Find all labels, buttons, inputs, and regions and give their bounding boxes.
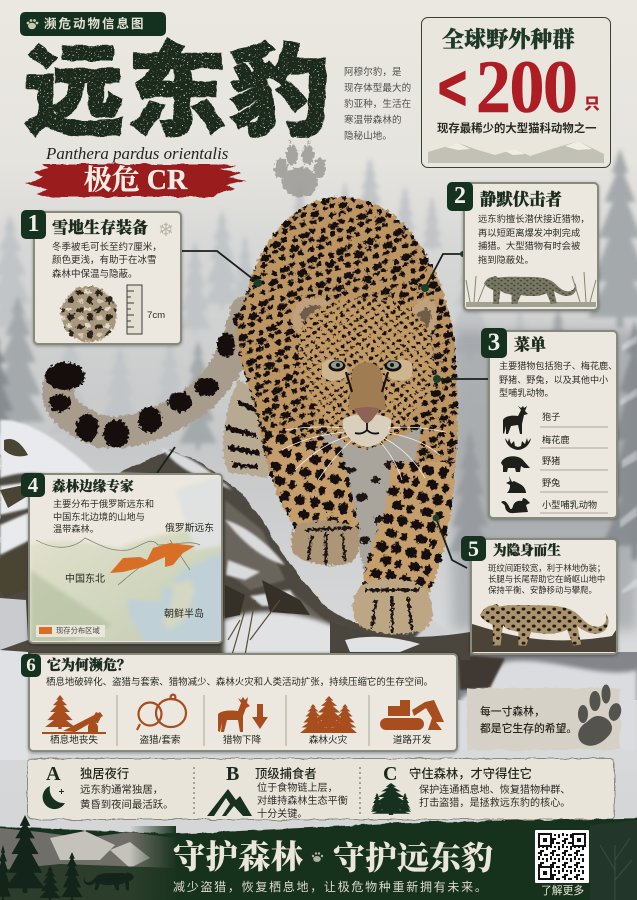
- ruler: [127, 285, 142, 334]
- description: 栖息地破碎化、盗猎与套索、猎物减少、森林火灾和人类活动扩张，持续压缩它的生存空间。: [46, 677, 433, 688]
- badge 6: [21, 654, 41, 677]
- panel 3: prey menu: 梅花鹿: [542, 434, 570, 444]
- tag: endangered animal infographic: 濒危动物信息图: [44, 17, 146, 31]
- badge 6: 6: [26, 655, 36, 676]
- heading: 菜单: [514, 337, 546, 354]
- icon: small paw: [26, 19, 38, 30]
- panel 6: why endangered: [21, 652, 460, 755]
- icon labels: 栖息地丧失: [50, 735, 98, 746]
- panel 3: prey menu: 野猪: [542, 456, 560, 466]
- QR code: [535, 830, 589, 883]
- panel 2: silent ambusher: [447, 181, 601, 561]
- heading: 静默伏击者: [480, 190, 562, 209]
- fact A: text: 远东豹通常独居， 黄昏到夜间最活跃。: [80, 785, 174, 811]
- latin name: Panthera pardus orientalis: [46, 144, 228, 163]
- mountain engraving: [428, 141, 604, 163]
- description: 主要分布于俄罗斯远东和 中国东北边境的山地与 温带森林。: [53, 499, 154, 534]
- connector lines: [157, 251, 488, 568]
- fact A: heading: 独居夜行: [80, 767, 129, 781]
- status banner: critically endangered: 极危 CR: [84, 165, 187, 196]
- heading: 全球野外种群: [442, 27, 575, 52]
- description: 主要猎物包括狍子、梅花鹿、 野猪、野兔，以及其他中小 型哺乳动物。: [499, 361, 617, 398]
- note: every inch of forest: [466, 684, 622, 752]
- fur sample: [60, 284, 142, 343]
- panel 3: prey menu: [481, 328, 620, 522]
- fact B: text: 位于食物链上层， 对维持森林生态平衡 十分关键。: [257, 783, 348, 820]
- panel 6: why endangered: 猎物下降: [223, 735, 261, 746]
- slogan: 守护森林: [173, 840, 303, 876]
- label 7cm: 7cm: [147, 310, 165, 321]
- panel 1: snow survival gear: [21, 210, 184, 348]
- icon: footer paw: [312, 852, 323, 862]
- status banner: critically endangered: [24, 163, 246, 198]
- description: 冬季被毛可长至约7厘米， 颜色更浅，有助于在冰雪 森林中保温与隐蔽。: [52, 242, 162, 280]
- prey icons: [501, 406, 608, 514]
- fact C: text: 保护连通栖息地、恢复猎物种群、 打击盗猎，是拯救远东豹的核心。: [419, 784, 570, 808]
- badge 5: 5: [468, 536, 479, 561]
- legend: 现存分布区域: [56, 626, 100, 635]
- QR caption: 了解更多: [541, 885, 584, 897]
- unit: 只: [584, 96, 600, 113]
- picture: leopard on branch: [472, 604, 616, 652]
- badge 1: [21, 210, 46, 239]
- badge 1: 1: [28, 211, 40, 237]
- badge 5: [461, 536, 486, 561]
- big number: 200: [476, 46, 576, 129]
- footer band: 守护远东豹: [333, 840, 493, 876]
- fact B: heading: 顶级捕食者: [255, 767, 316, 781]
- panel: global wild population: [421, 17, 611, 168]
- fact C: letter: C: [383, 763, 397, 785]
- badge 2: 2: [454, 183, 466, 209]
- icon: snowflake: ❄: [158, 219, 174, 241]
- badge 2: [447, 182, 473, 211]
- map label: Russian Far East: 俄罗斯远东: [165, 523, 214, 534]
- icon: grey paw print: [273, 140, 326, 198]
- sketch: stalking leopard: [466, 272, 596, 307]
- tagline: 减少盗猎，恢复栖息地，让极危物种重新拥有未来。: [173, 880, 489, 894]
- fact B: letter: B: [226, 763, 239, 785]
- fact strip A B C: [26, 757, 616, 822]
- map label: Korean Peninsula: 朝鲜半岛: [164, 609, 204, 620]
- less-than sign: <: [438, 54, 467, 123]
- badge 4: 4: [28, 473, 38, 497]
- tag: endangered animal infographic: [20, 12, 166, 36]
- fact A: letter: A: [46, 763, 60, 785]
- panel 4: forest edge expert: [21, 472, 225, 646]
- badge 3: [481, 328, 507, 358]
- heading: 它为何濒危？: [47, 659, 131, 674]
- icon: dark paw print: [578, 684, 622, 746]
- description: 斑纹间距较宽，利于林地伪装； 长腿与长尾帮助它在崎岖山地中 保持平衡、安静移动与攀爬。: [488, 562, 605, 594]
- heading: 雪地生存装备: [52, 220, 148, 237]
- leopard illustration: [45, 197, 470, 660]
- note: every inch of forest: 每一寸森林， 都是它生存的希望。: [480, 706, 577, 735]
- threat icons: [42, 694, 444, 746]
- icons: moon, mountain, tree: [42, 767, 412, 816]
- panel 6: why endangered: 道路开发: [393, 735, 431, 746]
- description: 远东豹擅长潜伏接近猎物， 再以短距离爆发冲刺完成 捕猎。大型猎物有时会被 拖到隐蔽处。: [478, 214, 590, 264]
- footer band: [0, 815, 637, 900]
- badge 3: 3: [488, 329, 500, 356]
- badge 4: [21, 473, 45, 497]
- panel 3: prey menu: 野兔: [542, 478, 560, 488]
- fact C: heading: 守住森林，才守得住它: [409, 767, 532, 781]
- panel 6: why endangered: 盗猎/套索: [139, 735, 181, 746]
- map: distribution: [30, 476, 221, 641]
- subtitle: 现存最稀少的大型猫科动物之一: [437, 123, 596, 135]
- panel 5: born to hide: [461, 536, 620, 658]
- rocks and snow: [0, 420, 637, 770]
- heading: 森林边缘专家: [52, 479, 134, 494]
- prey list labels: 狍子: [542, 412, 560, 422]
- map label: Northeast China: 中国东北: [65, 574, 105, 585]
- intro text: 阿穆尔豹，是 现存体型最大的 豹亚种，生活在 寒温带森林的 隐秘山地。: [344, 66, 411, 142]
- panel 3: prey menu: 小型哺乳动物: [542, 500, 597, 510]
- heading: 为隐身而生: [493, 543, 561, 558]
- panel 6: why endangered: 森林火灾: [309, 735, 347, 746]
